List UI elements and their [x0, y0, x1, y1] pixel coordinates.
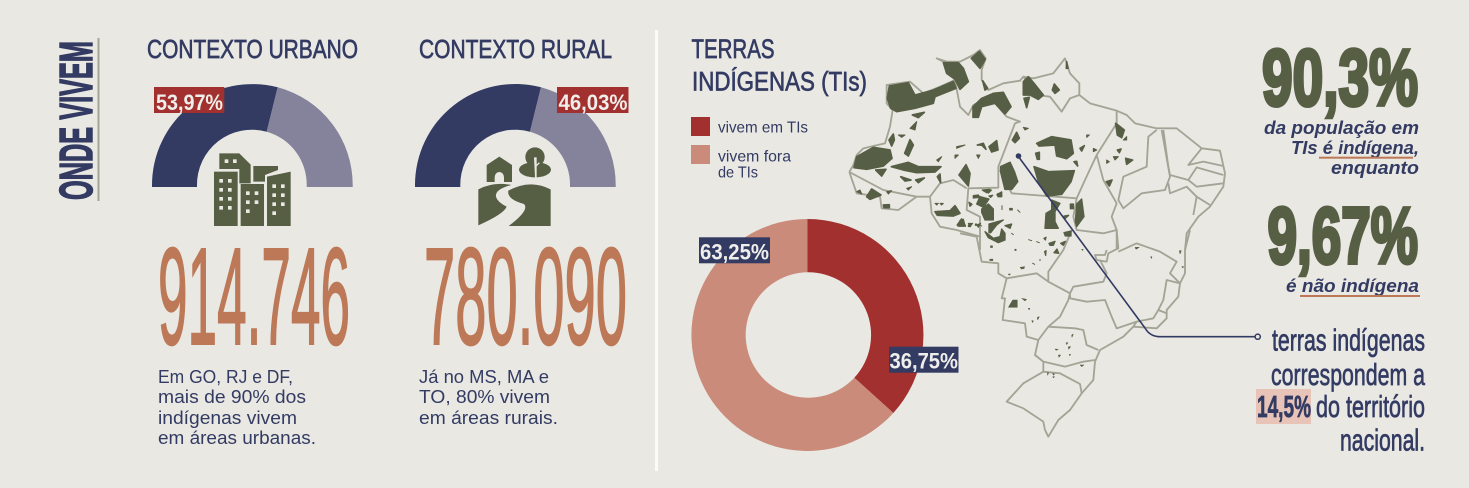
callout text: 14,5% do território: nacional. — [1340, 423, 1425, 458]
icon: city buildings — [214, 153, 291, 226]
stat: 90,3% — [1262, 33, 1419, 178]
map: indigenous lands north — [854, 51, 1133, 227]
text: da população em TIs: da população em — [1264, 118, 1419, 138]
stat: 9,67% — [1268, 191, 1420, 297]
gauge chart: rural: 46,03% — [558, 90, 628, 115]
text: rural description: TO, 80% vivem — [419, 387, 550, 407]
legend: vivem em TIs — [718, 120, 808, 137]
donut chart — [691, 219, 958, 451]
donut chart: 36,75% — [890, 349, 958, 374]
panel: contexto urbano — [147, 34, 358, 448]
callout text: 14,5% do território — [1256, 323, 1426, 458]
text: urbano description: mais de 90% dos — [158, 387, 306, 407]
text: 780.090 — [424, 220, 627, 374]
text: da população em TIs — [1264, 118, 1419, 178]
gauge chart: urbano: 53,97% — [156, 90, 223, 115]
text: rural description: Já no MS, MA e — [419, 367, 549, 387]
map: indigenous lands south — [1008, 247, 1184, 378]
icon: rural landscape — [478, 147, 551, 226]
callout text: 14,5% do território: do território — [1316, 389, 1425, 424]
panel: contexto rural — [415, 34, 628, 428]
heading: contexto rural: CONTEXTO RURAL — [419, 34, 612, 64]
text: rural description: em áreas rurais. — [419, 408, 558, 428]
gauge chart: rural — [415, 84, 628, 187]
map north: state outlines — [849, 50, 1225, 250]
legend: vivem fora — [718, 149, 791, 166]
text: urbano description: Em GO, RJ e DF, — [158, 367, 293, 387]
map: Brazil with indigenous lands — [849, 50, 1260, 437]
donut chart: 63,25% — [700, 240, 769, 264]
text: urbano description — [158, 367, 316, 448]
panel: terras indígenas — [691, 34, 958, 451]
callout line: to terras indígenas text — [1016, 153, 1260, 339]
text: rural description — [419, 367, 558, 428]
legend: de TIs — [718, 165, 758, 182]
text: urbano description: indígenas vivem — [158, 408, 297, 428]
heading: contexto urbano: CONTEXTO URBANO — [147, 34, 358, 64]
legend — [691, 117, 808, 182]
text: da população em TIs: enquanto — [1331, 158, 1419, 178]
heading: terras indígenas: INDÍGENAS (TIs) — [692, 66, 867, 96]
text: urbano description: em áreas urbanas. — [158, 428, 316, 448]
gauge chart: urbano — [152, 84, 353, 187]
text: é não indígena: é não indígena — [1286, 276, 1419, 296]
callout text: 14,5% do território: 14,5% — [1257, 389, 1311, 424]
heading: terras indígenas: TERRAS — [692, 34, 774, 64]
text: 914.746 — [158, 220, 350, 374]
map: indigenous lands Mato Grosso — [960, 189, 1084, 268]
heading: terras indígenas — [692, 34, 867, 96]
map south: state outlines — [960, 230, 1190, 437]
text: da população em TIs: TIs é indígena, — [1291, 138, 1419, 158]
